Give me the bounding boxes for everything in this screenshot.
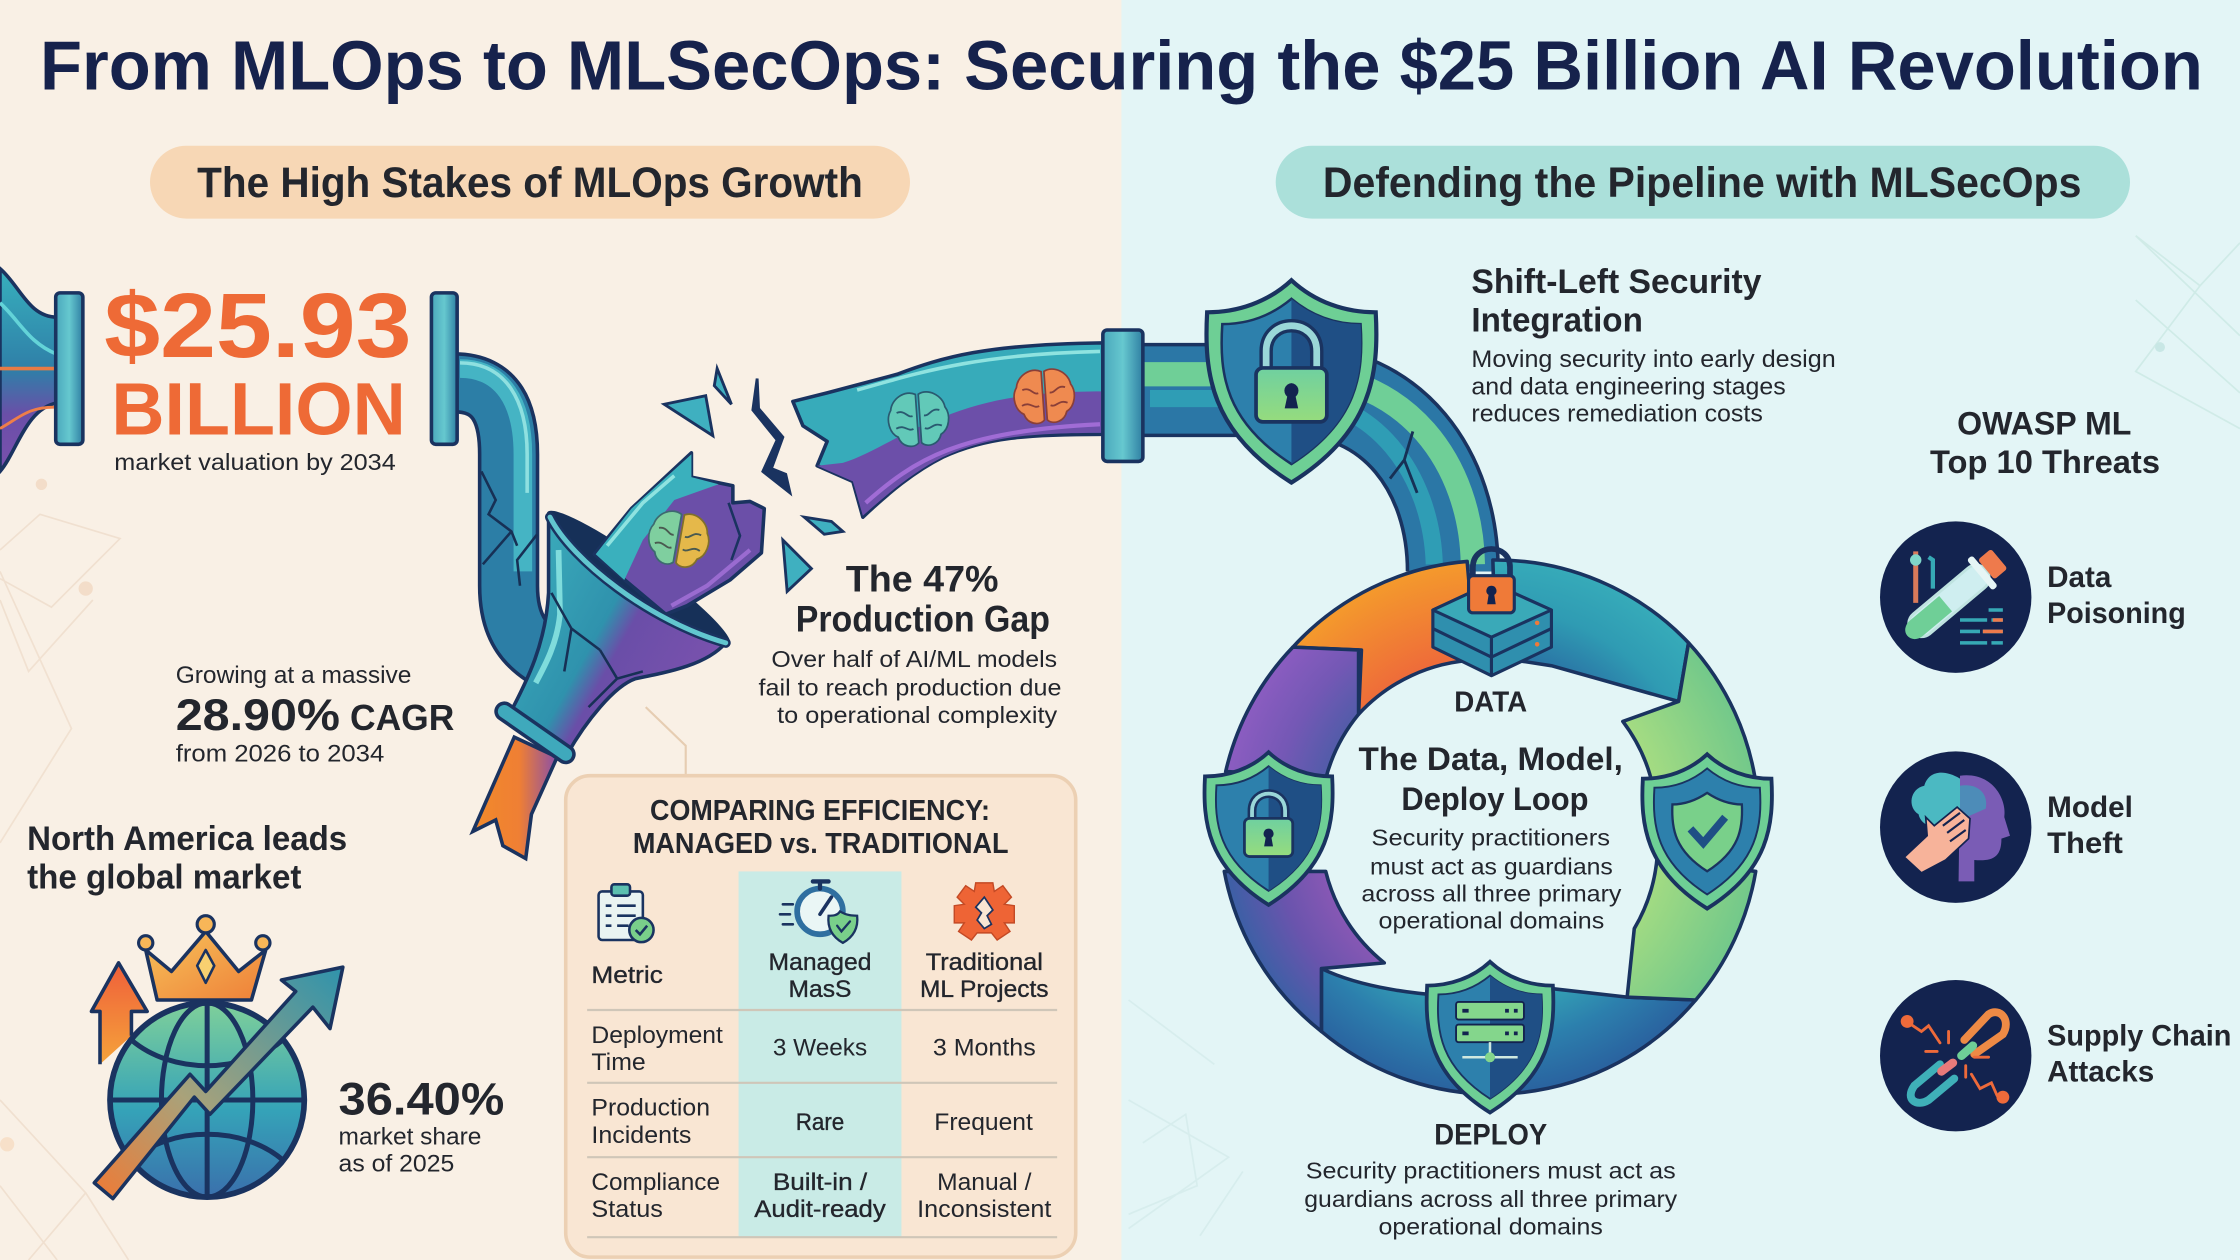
table row: compliance status: Inconsistent: [917, 1196, 1052, 1223]
loop centre text: [1359, 740, 1623, 934]
table header row: Traditional: [926, 949, 1043, 976]
heading: North America: North America leads: [27, 820, 347, 858]
icon: orange brain: [1012, 368, 1076, 425]
stat: market valuation: [104, 275, 411, 475]
table row: production incidents: Rare: [796, 1109, 844, 1136]
table row: production incidents: Frequent: [934, 1109, 1033, 1136]
callout: production gap: fail to reach production due: [759, 675, 1061, 701]
loop centre text: must act as guardians: [1370, 853, 1613, 879]
heading: OWASP threats: OWASP ML: [1957, 404, 2131, 441]
section heading: right pill: Defending the Pipeline with MLSecOps: [1323, 159, 2081, 207]
threat: supply chain attacks: [1880, 980, 2231, 1131]
ring segment: orange: [1293, 561, 1476, 714]
icon: server shield bottom: [1427, 962, 1553, 1113]
pipeline: shards and crack: [664, 369, 843, 591]
table row: deployment time: Time: [591, 1049, 646, 1076]
table card: [566, 776, 1076, 1257]
loop centre text: across all three primary: [1361, 880, 1622, 906]
stat: market share: as of 2025: [339, 1150, 454, 1177]
threat: model theft: [1880, 751, 2133, 903]
ring segment: green upper: [1623, 643, 1757, 793]
stat: CAGR: CAGR: [350, 698, 454, 738]
icon: stopwatch with shield: [780, 881, 857, 943]
pipeline: broken lower section with rim: [550, 453, 764, 643]
loop centre text: The Data, Model,: [1359, 740, 1623, 777]
icon: check shield right: [1642, 754, 1772, 909]
callout: production gap: [759, 557, 1061, 728]
stat: market valuation: BILLION: [111, 367, 406, 450]
threat: model theft: Theft: [2047, 827, 2123, 860]
ring segment: teal top: [1493, 560, 1689, 701]
heading: OWASP threats: Top 10 Threats: [1930, 443, 2160, 480]
section heading: right pill: [1276, 146, 2130, 219]
stat: CAGR: from 2026 to 2034: [176, 740, 384, 767]
icon: globe, crown and rising arrow: [91, 916, 343, 1199]
callout: production gap: Over half of AI/ML models: [771, 646, 1057, 672]
threat: supply chain attacks: Supply Chain: [2047, 1020, 2231, 1053]
callout: production gap: Production Gap: [796, 597, 1050, 639]
background: right cool panel: [1121, 0, 2240, 1260]
loop label: DEPLOY: [1304, 1118, 1677, 1239]
threat: data poisoning: [1880, 521, 2186, 673]
background: left warm panel: [0, 0, 1601, 1260]
section heading: left pill: [150, 146, 910, 219]
callout: production gap: to operational complexity: [777, 702, 1057, 728]
table row: production incidents: Production: [591, 1095, 710, 1122]
comparison table: [566, 776, 1076, 1257]
loop label: DEPLOY: operational domains: [1379, 1213, 1603, 1239]
ring segment: green lower: [1627, 857, 1756, 1000]
table row: compliance status: Audit-ready: [754, 1196, 887, 1223]
table row: compliance status: [591, 1169, 1052, 1223]
managed column highlight: [739, 871, 901, 1237]
text: shift-left security: and data engineering stages: [1471, 373, 1786, 400]
text: shift-left security: Integration: [1471, 301, 1643, 339]
loop label: DATA: DATA: [1454, 686, 1527, 718]
icon: padlock shield left: [1204, 752, 1333, 905]
table row: deployment time: 3 Weeks: [773, 1035, 867, 1062]
threat: model theft: Model: [2047, 791, 2133, 824]
text: shift-left security: reduces remediation costs: [1471, 400, 1763, 427]
table header row: ML Projects: [920, 976, 1049, 1003]
section heading: left pill: The High Stakes of MLOps Growth: [197, 159, 863, 207]
table heading: COMPARING EFFICIENCY:: [650, 795, 990, 827]
ring segment: bottom teal: [1321, 969, 1696, 1094]
heading: North America: [27, 820, 347, 897]
ring segment: purple upper: [1226, 647, 1359, 779]
loop diagram: segmented ring: [1224, 560, 1757, 1094]
table row: production incidents: Incidents: [591, 1122, 691, 1149]
stat: CAGR: Growing at a massive: [176, 662, 411, 689]
icon: broken gear: [954, 883, 1014, 940]
pipeline: descending pipe with cracks: [431, 293, 560, 666]
table row: compliance status: Built-in /: [773, 1169, 867, 1196]
table row: deployment time: 3 Months: [933, 1035, 1036, 1062]
ring segment: purple lower: [1224, 871, 1384, 1031]
pipeline: green flange: [1103, 330, 1143, 461]
table header row: MasS: [789, 976, 851, 1003]
title: From MLOps to MLSecOps: Securing the $25 Billion AI Revolution: [40, 26, 2203, 104]
pipeline: protected arc into loop: [1143, 374, 1473, 571]
stat: market share: market share: [339, 1123, 481, 1150]
stat: market valuation: $25.93: [104, 275, 411, 377]
heading: North America: the global market: [27, 859, 301, 897]
table row: compliance status: Status: [591, 1196, 663, 1223]
icon: clipboard: [599, 884, 654, 942]
table heading: MANAGED vs. TRADITIONAL: [633, 828, 1009, 860]
icon: server with orange lock: [1433, 549, 1551, 676]
table row: compliance status: Compliance: [591, 1169, 720, 1196]
text: shift-left security: Shift-Left Security: [1471, 263, 1761, 301]
table row: deployment time: Deployment: [591, 1022, 723, 1049]
stat: market valuation: market valuation by 2034: [114, 449, 396, 475]
table header row: Managed: [769, 949, 871, 976]
stat: market share: [339, 1073, 504, 1177]
loop centre text: operational domains: [1379, 908, 1604, 934]
threat: data poisoning: Poisoning: [2047, 597, 2186, 630]
callout: production gap: The 47%: [846, 557, 999, 599]
threat: data poisoning: Data: [2047, 561, 2112, 594]
icon: padlock shield on pipeline: [1206, 280, 1376, 483]
icon: test tube: [1880, 521, 2031, 673]
icon: teal brain: [887, 390, 950, 448]
heading: OWASP threats: [1930, 404, 2160, 480]
loop centre text: Deploy Loop: [1401, 780, 1589, 817]
table row: deployment time: [591, 1022, 1036, 1076]
threat: supply chain attacks: Attacks: [2047, 1055, 2154, 1088]
loop label: DEPLOY: Security practitioners must act as: [1306, 1158, 1676, 1184]
text: shift-left security: [1471, 263, 1836, 427]
text: shift-left security: Moving security into early design: [1471, 346, 1836, 373]
loop label: DEPLOY: guardians across all three primary: [1304, 1186, 1677, 1212]
stat: CAGR: 28.90%: [176, 691, 340, 740]
stat: market share: 36.40%: [339, 1073, 504, 1124]
pipeline: left inlet pipe with flanges: [0, 269, 83, 471]
table header row: Metric: [591, 962, 663, 989]
pipeline: cracked funnel: [473, 498, 740, 859]
icon: brain on funnel section: [644, 508, 713, 571]
table header row: [591, 949, 1049, 1003]
table heading: [633, 795, 1009, 860]
icon: hand on brain: [1880, 751, 2031, 903]
table row: production incidents: [591, 1095, 1033, 1149]
table row: compliance status: Manual /: [937, 1169, 1032, 1196]
stat: CAGR: [176, 662, 454, 767]
loop centre text: Security practitioners: [1371, 825, 1610, 851]
loop label: DEPLOY: DEPLOY: [1434, 1118, 1547, 1151]
pipeline: upper section to flange: [793, 343, 1103, 517]
icon: broken chain: [1880, 980, 2031, 1131]
